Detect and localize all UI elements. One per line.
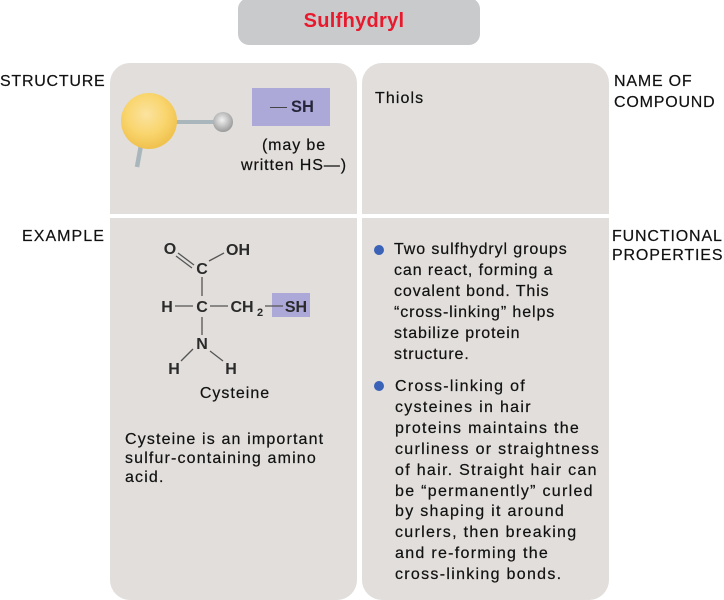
label: structure: STRUCTURE bbox=[0, 73, 105, 90]
icon: ball and stick model bbox=[121, 93, 233, 168]
bullet 2 dot bbox=[374, 381, 384, 391]
chart: cysteine structural formula: H bbox=[225, 361, 237, 378]
structure note bbox=[240, 137, 347, 174]
bullet 2 text: curlers, then breaking bbox=[395, 524, 577, 541]
label: name of compound: NAME OF bbox=[614, 73, 692, 90]
molecule name: Cysteine bbox=[200, 385, 270, 402]
panel: structure bbox=[110, 63, 357, 214]
bullet 2 text bbox=[395, 378, 600, 583]
label: functional properties: FUNCTIONAL bbox=[612, 228, 723, 245]
label: functional properties: PROPERTIES bbox=[612, 247, 723, 264]
chart: cysteine structural formula: H bbox=[161, 299, 173, 316]
chart: cysteine structural formula: CH bbox=[230, 299, 254, 316]
label: functional properties bbox=[612, 228, 723, 264]
structure note: (may be bbox=[262, 137, 326, 154]
bullet 1 dot bbox=[374, 245, 384, 255]
example description: Cysteine is an important bbox=[125, 431, 324, 448]
chart: cysteine structural formula: C bbox=[196, 299, 208, 316]
chart: cysteine structural formula: H bbox=[168, 361, 180, 378]
bullet 1 text: stabilize protein bbox=[394, 325, 520, 342]
SH highlight box bbox=[252, 88, 330, 126]
bullet 2 text: of hair. Straight hair can bbox=[395, 462, 598, 479]
bullet 2 text: cysteines in hair bbox=[395, 399, 532, 416]
compound name: Thiols bbox=[375, 90, 424, 107]
bullet 2 text: proteins maintains the bbox=[395, 420, 580, 437]
bullet 1 text bbox=[394, 241, 568, 363]
panel: functional properties bbox=[362, 218, 609, 600]
label: example: EXAMPLE bbox=[22, 228, 105, 245]
bullet 1 text: Two sulfhydryl groups bbox=[394, 241, 568, 258]
bullet 1 text: covalent bond. This bbox=[394, 283, 550, 300]
bullet 2 text: and re-forming the bbox=[395, 545, 549, 562]
bullet 1 text: structure. bbox=[394, 346, 470, 363]
bullet 1 text: can react, forming a bbox=[394, 262, 553, 279]
example description: sulfur-containing amino bbox=[125, 450, 317, 467]
bullet 2 text: Cross-linking of bbox=[395, 378, 526, 395]
title: Sulfhydryl bbox=[304, 10, 404, 32]
example description bbox=[125, 431, 324, 486]
label: name of compound: COMPOUND bbox=[614, 94, 716, 111]
bullet 2 text: by shaping it around bbox=[395, 503, 565, 520]
panel: example bbox=[110, 218, 357, 600]
chart: cysteine structural formula: SH bbox=[285, 299, 307, 316]
chart: cysteine structural formula: OH bbox=[226, 242, 250, 259]
bullet 1 text: “cross-linking” helps bbox=[394, 304, 555, 321]
example description: acid. bbox=[125, 469, 165, 486]
chart: cysteine structural formula: N bbox=[196, 336, 208, 353]
chart: cysteine structural formula bbox=[161, 241, 310, 378]
bullet 2 text: curliness or straightness bbox=[395, 441, 600, 458]
chart: cysteine structural formula: O bbox=[164, 241, 176, 258]
panel: name of compound bbox=[362, 63, 609, 214]
structure note: written HS—) bbox=[241, 157, 347, 174]
label: name of compound bbox=[614, 73, 716, 111]
title pill bbox=[238, 0, 480, 45]
bullet 2 text: cross-linking bonds. bbox=[395, 566, 562, 583]
chart: cysteine structural formula: C bbox=[196, 261, 208, 278]
bullet 2 text: be “permanently” curled bbox=[395, 483, 594, 500]
SH group label: SH bbox=[291, 98, 314, 116]
chart: cysteine structural formula: 2 bbox=[257, 307, 263, 319]
